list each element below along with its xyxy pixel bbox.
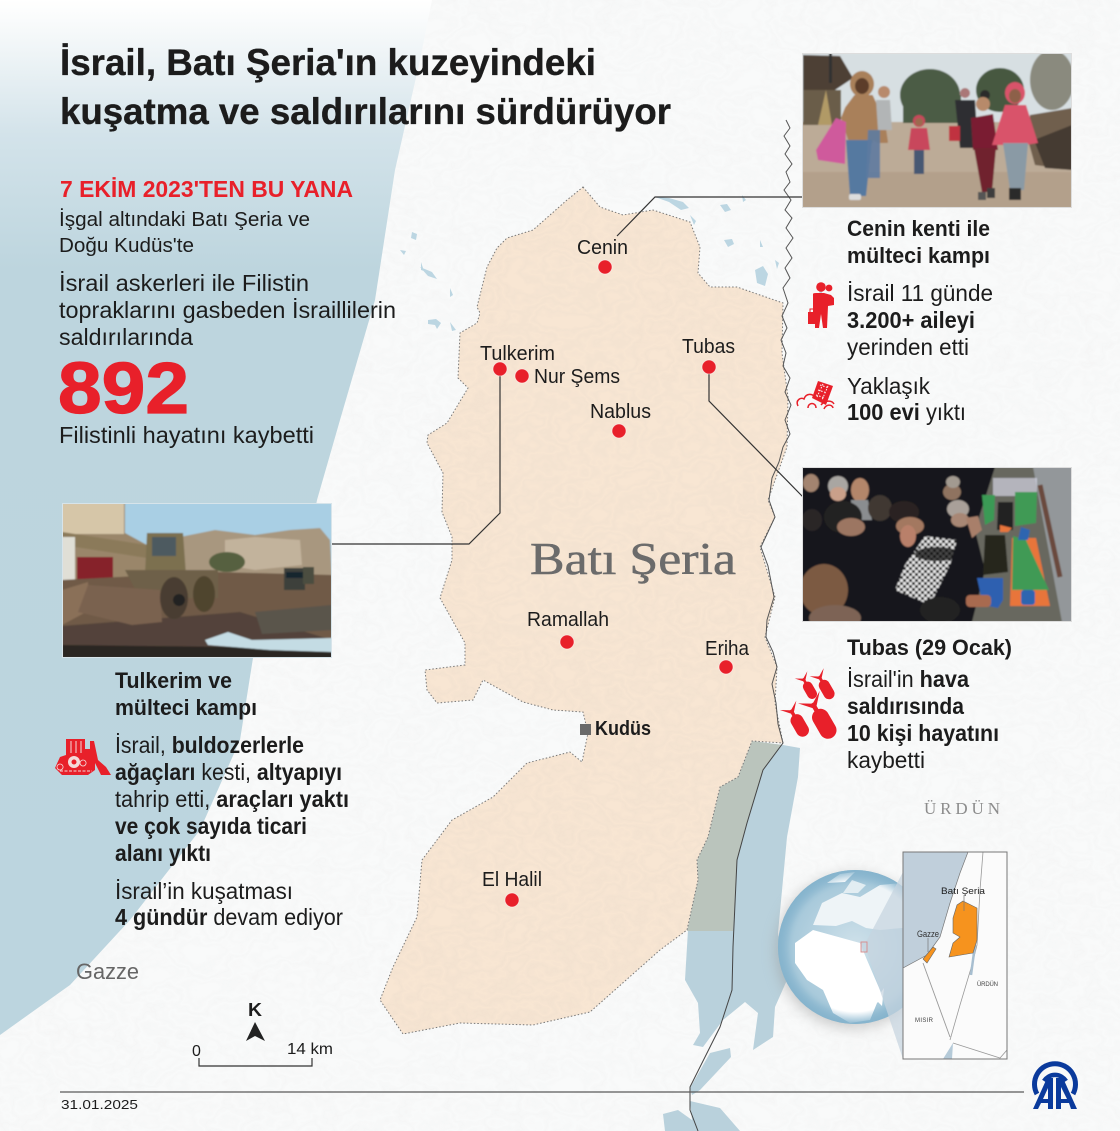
bulldozer: [145, 533, 186, 575]
north arrow: [246, 1000, 265, 1041]
scale bar: [192, 1041, 333, 1066]
summary text block: [58, 176, 396, 448]
map labels and city markers: El Halil: [482, 869, 542, 891]
text: Tubas details: kaybetti: [847, 747, 925, 773]
text: Tulkerim details: alanı yıktı: [115, 840, 211, 866]
inset locator map: Gazze: [917, 929, 939, 939]
scale bar: 14 km: [287, 1041, 333, 1058]
sea: [0, 0, 432, 1035]
text: Cenin displaced: İsrail 11 günde: [847, 280, 993, 306]
summary text block: İsrail askerleri ile Filistin: [59, 270, 309, 296]
title: İsrail, Batı Şeria'ın kuzeyindeki: [60, 42, 596, 83]
photo: Tulkerim: [62, 503, 332, 658]
scale bar: 0: [192, 1043, 201, 1060]
locator globe: [772, 868, 902, 1034]
text: Tulkerim details: 4 gündür devam ediyor: [115, 904, 343, 930]
map labels and city markers: Tubas: [682, 336, 735, 358]
summary text block: Doğu Kudüs'te: [59, 235, 194, 257]
text: houses destroyed: [847, 373, 966, 425]
inset locator map: Batı Şeria: [941, 886, 986, 897]
stretchers: [1010, 538, 1050, 606]
inset locator map: [903, 852, 1007, 1059]
heading: Cenin: mülteci kampı: [847, 243, 990, 268]
truck: [284, 568, 305, 590]
text: Cenin displaced: [847, 280, 993, 360]
text: Cenin displaced: 3.200+ aileyi: [847, 307, 975, 333]
region label: Ürdün: ÜRDÜN: [924, 799, 1000, 818]
map labels and city markers: Cenin: [577, 237, 628, 259]
map labels and city markers: Eriha: [705, 638, 750, 660]
keffiyeh: [895, 536, 957, 605]
summary text block: Filistinli hayatını kaybetti: [59, 422, 314, 448]
icon: bombs: [780, 668, 843, 744]
heading: Tulkerim: mülteci kampı: [115, 695, 257, 720]
text: Tubas details: saldırısında: [847, 693, 964, 719]
date: 31.01.2025: [61, 1097, 138, 1112]
map labels and city markers: Tulkerim: [480, 343, 555, 365]
photo: Tubas: [800, 467, 1072, 631]
map labels and city markers: Kudüs: [595, 718, 651, 740]
inset locator map: ÜRDÜN: [977, 981, 998, 988]
map labels and city markers: Nablus: [590, 401, 651, 423]
woman: [960, 88, 970, 98]
text: Tulkerim details: İsrail, buldozerlerle: [115, 732, 304, 758]
text: Tubas details: 10 kişi hayatını: [847, 720, 999, 746]
pink kid: [1005, 82, 1025, 104]
inset: Gaza: [923, 947, 936, 963]
title: [60, 42, 671, 132]
text: Cenin displaced: yerinden etti: [847, 334, 969, 360]
inset: West Bank: [949, 901, 977, 957]
text: Tulkerim details: ağaçları kesti, altyapıyı: [115, 759, 342, 785]
small red kid: [913, 115, 925, 127]
text: Tulkerim details: İsrail’in kuşatması: [115, 878, 293, 904]
West Bank territory: [370, 180, 800, 1050]
summary text block: saldırılarında: [59, 324, 193, 350]
map labels and city markers: [480, 237, 750, 907]
heading: Tubas: Tubas (29 Ocak): [847, 635, 1012, 660]
icon: family with suitcase: [808, 282, 834, 328]
region label: Batı Şeria: Batı Şeria: [530, 534, 736, 584]
photo: Cenin: [802, 50, 1074, 208]
summary text block: topraklarını gasbeden İsraillilerin: [59, 297, 396, 323]
icon: collapsing building: [797, 381, 834, 409]
heading: Tulkerim: Tulkerim ve: [115, 668, 232, 693]
Jordan river border: [690, 743, 783, 1131]
text: Tulkerim details: ve çok sayıda ticari: [115, 813, 307, 839]
footer line: [60, 1091, 1024, 1093]
map labels and city markers: Nur Şems: [534, 366, 620, 388]
region label: Gazze: Gazze: [76, 959, 139, 984]
leader lines: [332, 197, 803, 544]
map labels and city markers: Ramallah: [527, 609, 609, 631]
heading: Tulkerim: [115, 668, 257, 720]
text: Tulkerim details: [115, 732, 349, 930]
kid maroon: [976, 97, 990, 111]
summary text block: 7 EKİM 2023'TEN BU YANA: [60, 176, 353, 202]
north arrow: K: [248, 1000, 262, 1020]
text: houses destroyed: 100 evi yıktı: [847, 399, 966, 425]
AA logo: [1033, 1064, 1077, 1109]
kid 1: [850, 71, 874, 97]
text: Tubas details: [847, 666, 999, 773]
text: Tulkerim details: tahrip etti, araçları yaktı: [115, 786, 349, 812]
dead sea: [685, 741, 800, 1050]
inset locator map: MISIR: [915, 1018, 934, 1024]
small lakes: [400, 195, 822, 331]
icon: bulldozer: [55, 739, 111, 775]
locator cone: [861, 872, 903, 1059]
heading: Cenin: Cenin kenti ile: [847, 216, 990, 241]
summary text block: İşgal altındaki Batı Şeria ve: [59, 208, 310, 231]
text: houses destroyed: Yaklaşık: [847, 373, 930, 399]
dead sea border area: [687, 741, 782, 931]
death toll number: 892: [58, 349, 189, 429]
title: kuşatma ve saldırılarını sürdürüyor: [60, 91, 671, 132]
globe region marker: [861, 942, 867, 952]
text: Tubas details: İsrail'in hava: [847, 666, 969, 692]
faces: [803, 474, 819, 492]
heading: Cenin: [847, 216, 990, 268]
